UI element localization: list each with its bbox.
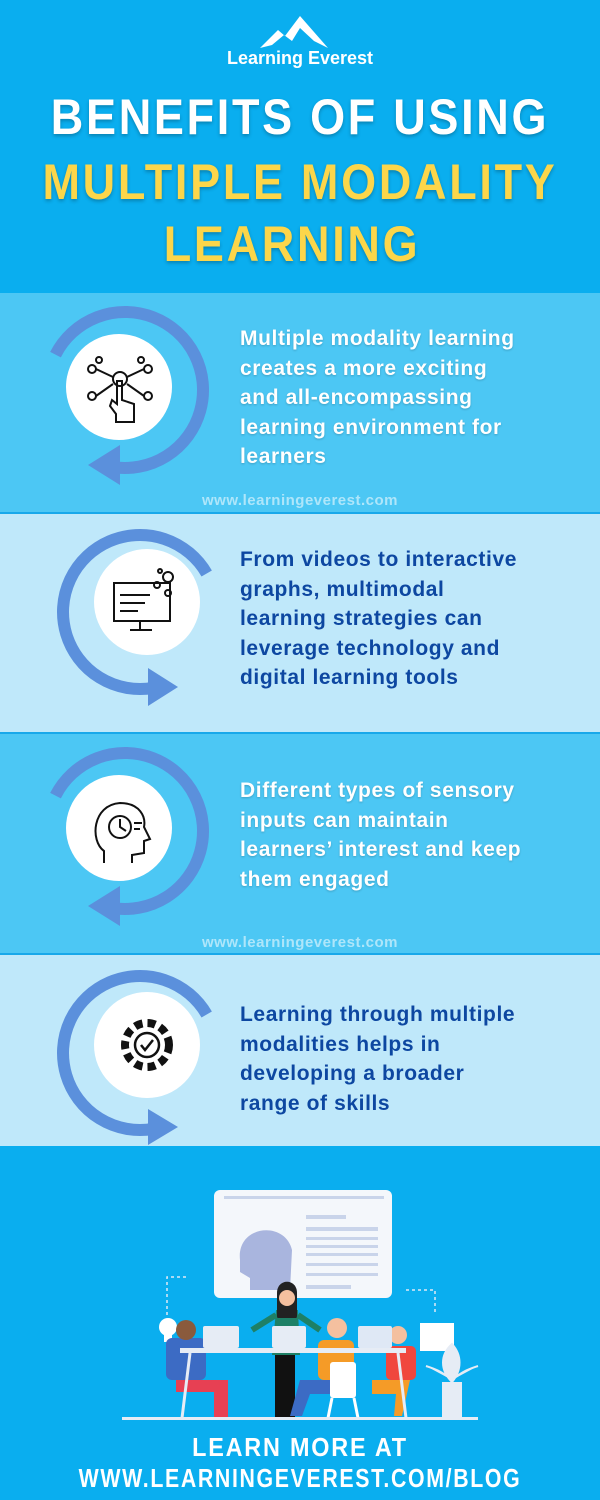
watermark: www.learningeverest.com: [202, 492, 398, 509]
text: developing a broader: [240, 1062, 464, 1085]
panel 2: [0, 514, 600, 732]
text: creates a more exciting: [240, 356, 487, 380]
panel 4: [0, 955, 600, 1146]
title: MULTIPLE MODALITY: [42, 154, 558, 210]
logo: [227, 16, 373, 68]
watermark: www.learningeverest.com: [202, 934, 398, 951]
icon: arc with network hand: [50, 306, 209, 485]
text: inputs can maintain: [240, 808, 449, 832]
text: [240, 779, 521, 892]
text: and all-encompassing: [240, 386, 473, 409]
title: [42, 89, 558, 272]
text: Different types of sensory: [240, 779, 515, 802]
text: range of skills: [240, 1092, 390, 1114]
panel 1: [0, 293, 600, 512]
logo: Learning Everest: [227, 48, 373, 68]
text: [240, 327, 515, 468]
footer call to action: LEARN MORE AT: [192, 1432, 408, 1462]
text: [240, 548, 517, 689]
text: them engaged: [240, 868, 390, 890]
text: From videos to interactive: [240, 548, 517, 571]
text: learning strategies can: [240, 607, 483, 630]
text: leverage technology and: [240, 636, 500, 660]
text: digital learning tools: [240, 666, 459, 689]
title: LEARNING: [164, 216, 420, 272]
footer call to action: WWW.LEARNINGEVEREST.COM/BLOG: [79, 1463, 521, 1493]
text: learners: [240, 445, 327, 468]
text: modalities helps in: [240, 1032, 440, 1056]
footer call to action: [78, 1432, 521, 1493]
text: learning environment for: [240, 416, 502, 438]
text: Multiple modality learning: [240, 327, 515, 350]
icon: arc with monitor: [57, 529, 212, 706]
text: [240, 1003, 515, 1114]
text: learners’ interest and keep: [240, 838, 521, 861]
panel 3: [0, 734, 600, 953]
title: BENEFITS OF USING: [51, 89, 549, 145]
text: Learning through multiple: [240, 1003, 515, 1026]
illustration: classroom: [122, 1190, 478, 1420]
icon: arc with head clock: [50, 747, 209, 926]
text: graphs, multimodal: [240, 578, 444, 600]
icon: arc with gear: [57, 970, 212, 1145]
